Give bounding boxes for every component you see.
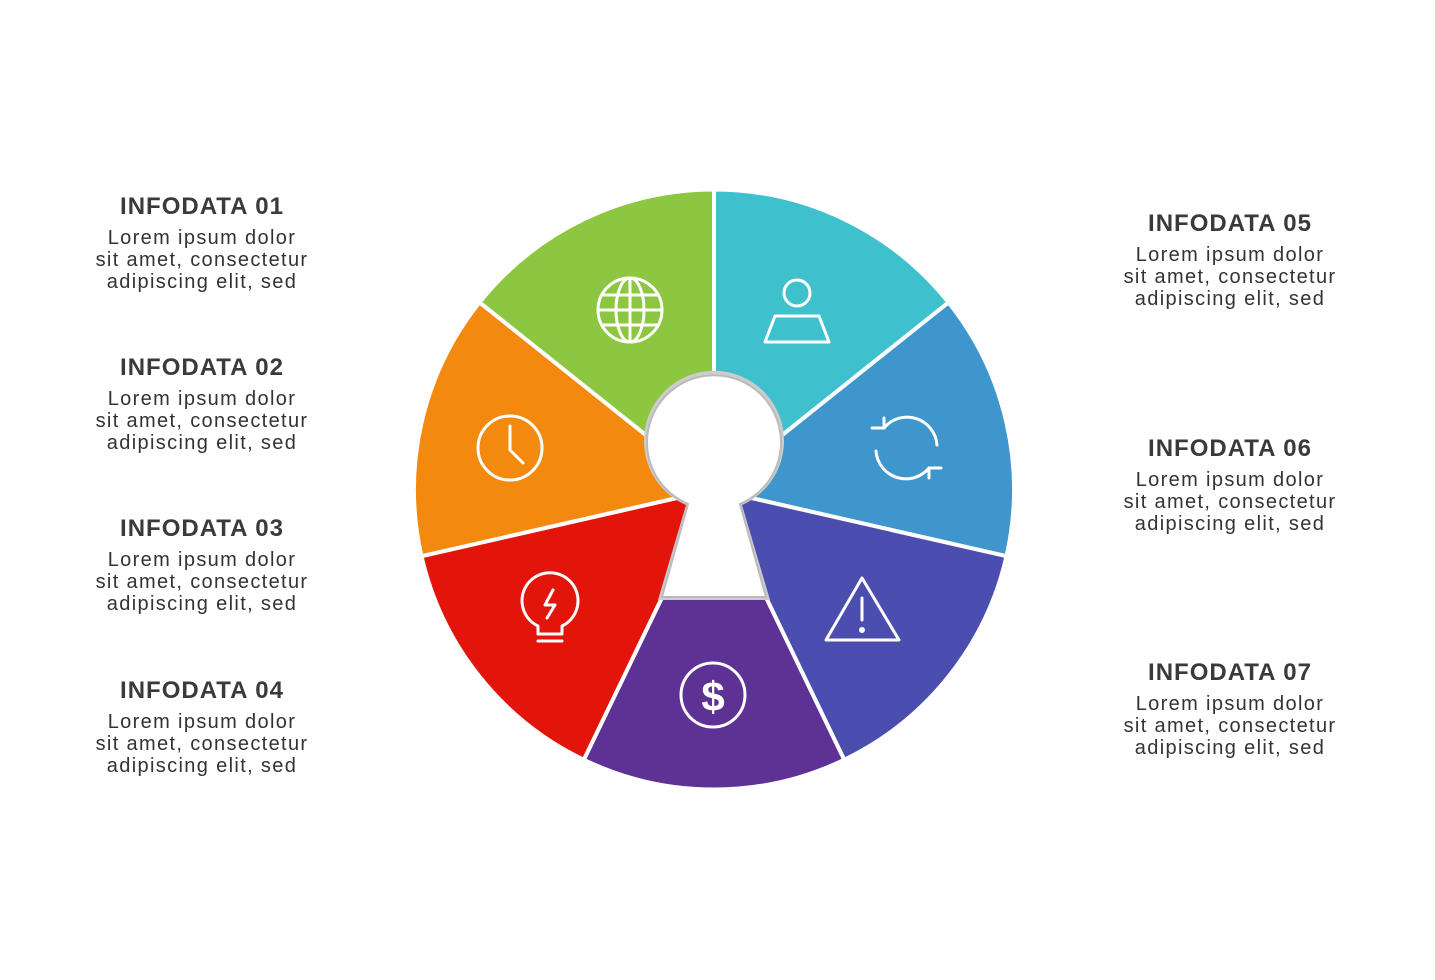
text block: infodata 03: sit amet, consectetur [96,571,308,593]
text block: infodata 02: sit amet, consectetur [96,410,308,432]
icon: bulb [522,573,578,641]
text block: infodata 03: Lorem ipsum dolor [108,549,296,571]
text block: infodata 07: sit amet, consectetur [1124,715,1336,737]
text block: infodata 04: adipiscing elit, sed [107,755,297,777]
text block: infodata 01: adipiscing elit, sed [107,271,297,293]
text block: infodata 01 [96,193,308,293]
text block: infodata 01: INFODATA 01 [120,193,284,220]
icon: person [765,280,829,342]
text block: infodata 04: sit amet, consectetur [96,733,308,755]
text block: infodata 06: Lorem ipsum dolor [1136,469,1324,491]
icon: warning [826,578,899,640]
text block: infodata 06 [1124,435,1336,535]
icon: globe [598,278,662,342]
text block: infodata 01: Lorem ipsum dolor [108,227,296,249]
segment: violet [714,490,1006,760]
text block: infodata 01: sit amet, consectetur [96,249,308,271]
text block: infodata 05: sit amet, consectetur [1124,266,1336,288]
text block: infodata 05: adipiscing elit, sed [1135,288,1325,310]
text block: infodata 05: Lorem ipsum dolor [1136,244,1324,266]
icon: clock [478,416,542,480]
segment: green [480,190,714,490]
text block: infodata 06: sit amet, consectetur [1124,491,1336,513]
icon: refresh [872,417,941,479]
text block: infodata 06: INFODATA 06 [1148,435,1312,462]
text block: infodata 04: Lorem ipsum dolor [108,711,296,733]
text block: infodata 03: adipiscing elit, sed [107,593,297,615]
text block: infodata 07: Lorem ipsum dolor [1136,693,1324,715]
keyhole [644,371,784,600]
segment: purple [584,490,844,790]
icon: dollar sign: $ [701,673,725,720]
text block: infodata 06: adipiscing elit, sed [1135,513,1325,535]
text block: infodata 04: INFODATA 04 [120,677,284,704]
text block: infodata 02: adipiscing elit, sed [107,432,297,454]
text block: infodata 04 [96,677,308,777]
icon: dollar [681,663,745,727]
text block: infodata 07: adipiscing elit, sed [1135,737,1325,759]
segment: red [422,490,714,760]
text block: infodata 05 [1124,210,1336,310]
text block: infodata 02: INFODATA 02 [120,354,284,381]
text block: infodata 02 [96,354,308,454]
text block: infodata 03 [96,515,308,615]
text block: infodata 02: Lorem ipsum dolor [108,388,296,410]
text block: infodata 07 [1124,659,1336,759]
segment: teal [714,190,948,490]
text block: infodata 05: INFODATA 05 [1148,210,1312,237]
segment: blue [714,302,1014,556]
segment: orange [414,302,714,556]
text block: infodata 03: INFODATA 03 [120,515,284,542]
text block: infodata 07: INFODATA 07 [1148,659,1312,686]
